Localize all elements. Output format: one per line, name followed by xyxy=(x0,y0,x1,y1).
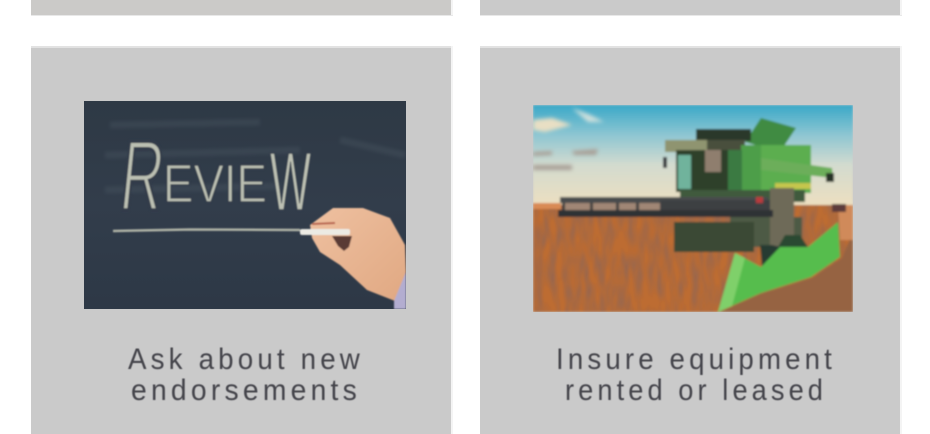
chalk word xyxy=(123,142,312,210)
caption: ask about new endorsements: endorsements xyxy=(131,374,361,407)
caption: ask about new endorsements xyxy=(128,343,364,407)
panel: ask about new endorsements xyxy=(31,46,453,434)
caption: insure equipment rented or leased: Insure equipment xyxy=(556,343,836,376)
hand holding chalk xyxy=(300,208,406,309)
photo: chalkboard with the word review xyxy=(84,101,406,309)
panel: insure equipment rented or leased xyxy=(480,46,902,434)
caption: insure equipment rented or leased xyxy=(556,343,836,407)
chalk underline xyxy=(113,230,300,231)
panel: top left (cropped) xyxy=(31,0,453,16)
chalk word: EVIE xyxy=(163,154,267,214)
photo: green combine harvester in a field xyxy=(533,105,853,312)
chalk word: W xyxy=(270,135,311,228)
chalk word: R xyxy=(116,120,169,232)
caption: insure equipment rented or leased: rented or leased xyxy=(565,374,827,407)
clouds xyxy=(533,108,604,170)
caption: ask about new endorsements: Ask about new xyxy=(128,343,364,376)
field xyxy=(533,205,853,312)
panel: top right (cropped) xyxy=(480,0,902,16)
combine harvester xyxy=(558,118,846,312)
